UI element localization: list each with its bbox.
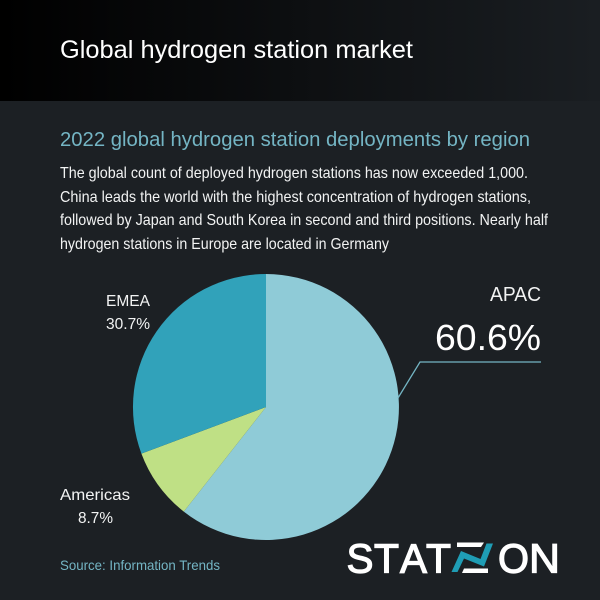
source: Source: Information Trends <box>60 557 220 573</box>
subtitle: 2022 global hydrogen station deployments by region <box>60 128 530 151</box>
logo mark: Z <box>452 542 493 573</box>
label: EMEA: EMEA <box>106 293 150 310</box>
value: EMEA: 30.7% <box>106 316 150 333</box>
value: APAC: 60.6% <box>435 317 541 358</box>
body text: China leads the world with the highest concentration of hydrogen stations, <box>60 189 531 206</box>
header band <box>0 0 600 101</box>
title: Global hydrogen station market <box>60 36 413 64</box>
slice: APAC <box>184 274 399 540</box>
logo <box>346 536 560 582</box>
logo: S <box>346 536 374 582</box>
leader line: APAC <box>398 362 541 398</box>
logo: N <box>529 536 560 582</box>
body text <box>60 165 548 253</box>
body text: hydrogen stations in Europe are located in Germany <box>60 236 389 253</box>
logo: O <box>498 536 529 582</box>
logo: A <box>400 536 428 582</box>
slice: EMEA <box>133 274 266 454</box>
pie chart <box>133 274 399 540</box>
slice: Americas <box>141 407 266 512</box>
logo: T <box>374 536 399 582</box>
body text: The global count of deployed hydrogen stations has now exceeded 1,000. <box>60 165 528 182</box>
label: Americas: Americas <box>60 487 130 504</box>
label: APAC: APAC <box>490 284 541 306</box>
logo: T <box>426 536 451 582</box>
body text: followed by Japan and South Korea in second and third positions. Nearly half <box>60 212 548 229</box>
value: Americas: 8.7% <box>78 510 113 527</box>
